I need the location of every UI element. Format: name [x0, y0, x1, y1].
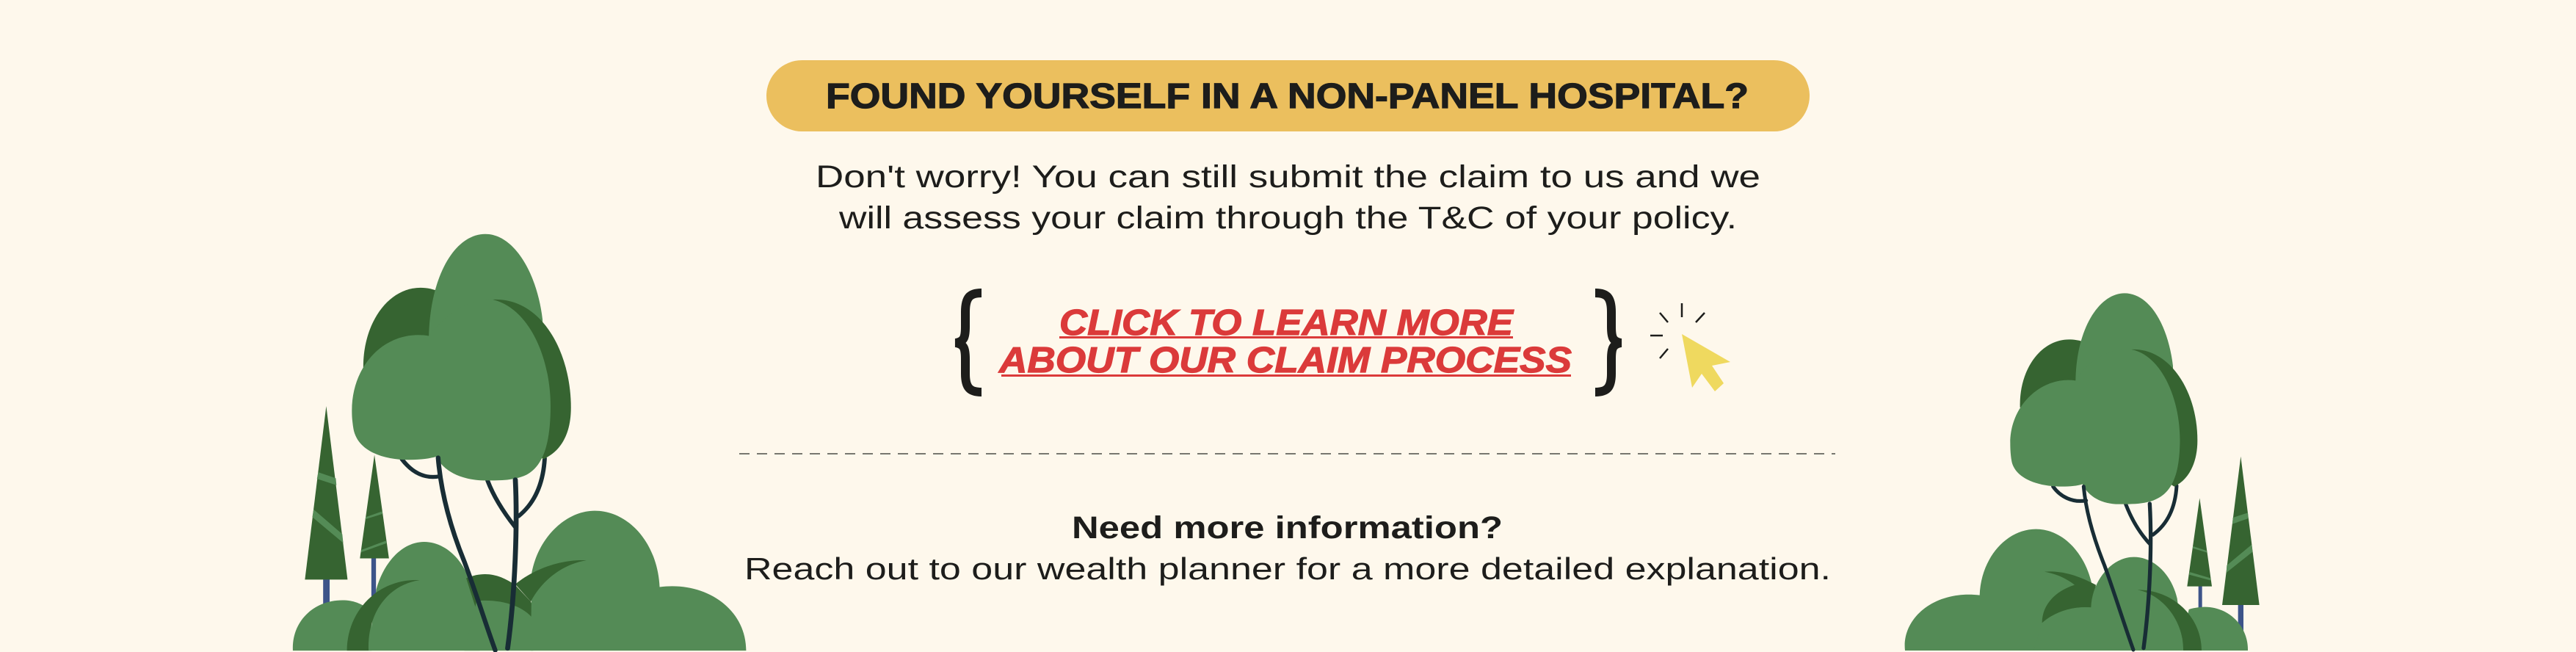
call to action link: ABOUT OUR CLAIM PROCESS [998, 341, 1572, 380]
icon: right bushes [1905, 529, 2248, 651]
call to action link [998, 303, 1572, 380]
title pill [766, 60, 1810, 131]
illustration: left trees and bushes [293, 234, 746, 651]
icon: left tree branches [402, 458, 545, 527]
icon: left tree trunks [438, 457, 516, 651]
title pill: FOUND YOURSELF IN A NON-PANEL HOSPITAL? [826, 77, 1749, 116]
icon: cursor click [1650, 303, 1730, 391]
icon: left conifers [305, 406, 389, 609]
more information text [744, 510, 1831, 586]
intro text: will assess your claim through the T&C of your policy. [838, 200, 1737, 236]
intro text [816, 159, 1760, 236]
more information text: Need more information? [1072, 510, 1503, 546]
icon: right tree branches [2053, 486, 2177, 545]
icon: right conifers [2187, 457, 2260, 631]
right brace [1595, 293, 1621, 392]
icon: right tree trunks [2083, 487, 2151, 650]
call to action link: CLICK TO LEARN MORE [1059, 303, 1514, 343]
icon: left bushes [293, 511, 746, 651]
icon: left tree crown [352, 234, 571, 480]
intro text: Don't worry! You can still submit the claim to us and we [816, 159, 1760, 195]
icon: right tree crown [2010, 293, 2197, 504]
more information text: Reach out to our wealth planner for a more detailed explanation. [744, 551, 1831, 586]
illustration: right trees and bushes [1905, 293, 2260, 651]
left brace [956, 293, 982, 392]
